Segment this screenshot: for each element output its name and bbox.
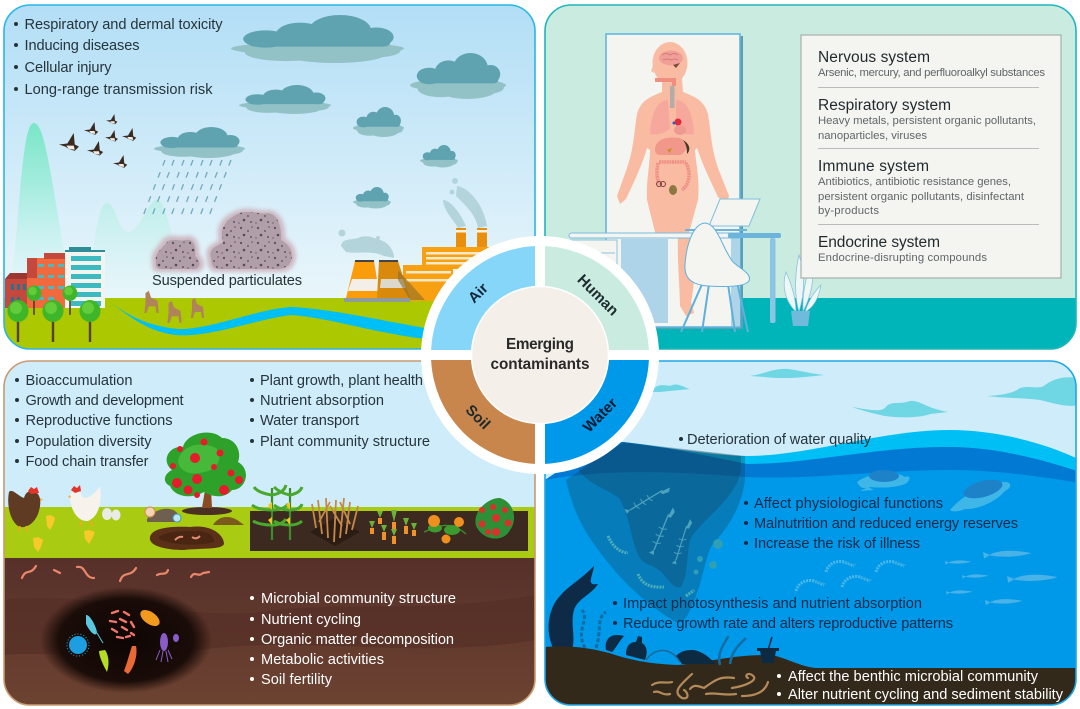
label: suspended particulates: Suspended particulates — [152, 273, 302, 289]
text: air effects: Long-range transmission risk — [24, 82, 213, 98]
ground — [4, 298, 434, 348]
text: soil effects: Organic matter decomposition — [261, 632, 454, 648]
respiratory system: nanoparticles, viruses — [818, 130, 927, 142]
ring label: water: Water — [580, 395, 621, 436]
icon: shrimps — [796, 561, 906, 591]
icon: corn — [252, 485, 302, 540]
ring label: human: Human — [574, 271, 622, 319]
icon: brain — [659, 50, 683, 68]
icon: trees — [8, 286, 100, 342]
text: soil effects: Soil fertility — [261, 672, 333, 688]
icon: brown hen — [8, 487, 43, 532]
icon: compost — [145, 507, 244, 525]
immune system: persistent organic pollutants, disinfectant — [818, 191, 1025, 203]
seabed — [545, 646, 1080, 709]
respiratory system: Heavy metals, persistent organic pollutants, — [818, 115, 1036, 127]
text: flora effects: Impact photosynthesis and nutrient absorption — [623, 596, 922, 612]
panel: soil — [4, 361, 535, 708]
center title: Emerging — [506, 336, 574, 353]
icon: suspended particulate clouds — [152, 209, 296, 272]
icon: chicks — [33, 515, 95, 552]
icon: kelp — [549, 566, 624, 652]
text: benthic effects: Affect the benthic microbial community — [788, 669, 1039, 685]
text: air effects — [14, 17, 223, 98]
text: air effects: Inducing diseases — [24, 38, 140, 54]
icon: smoke — [338, 178, 487, 258]
immune system: by-products — [818, 205, 879, 217]
icon: fish skeletons — [624, 488, 706, 566]
icon: plant — [784, 255, 821, 326]
icon: wheat — [310, 498, 360, 546]
icon: apple tree — [165, 433, 246, 515]
icon: microbes — [67, 607, 179, 674]
immune system — [818, 158, 1025, 217]
icon: fishes — [945, 551, 1058, 605]
icon: clouds — [231, 15, 506, 208]
icon: river — [105, 298, 425, 339]
text: animal effects: Food chain transfer — [26, 454, 149, 470]
text: animal effects: Bioaccumulation — [26, 373, 132, 389]
endocrine system — [818, 234, 987, 264]
text: air effects: Respiratory and dermal toxicity — [24, 17, 223, 33]
nervous system: Arsenic, mercury, and perfluoroalkyl substances — [818, 67, 1045, 79]
icon: crop field — [250, 485, 528, 551]
icon: carrots — [369, 510, 417, 544]
text: animal effects — [15, 373, 184, 470]
text: flora effects — [613, 596, 953, 632]
icon: heart — [672, 118, 686, 135]
panel: water — [545, 361, 1080, 709]
ring label: air: Air — [465, 280, 492, 307]
water surface wave — [545, 430, 1080, 709]
text box: body systems — [801, 35, 1061, 278]
icon: eggs — [102, 508, 120, 520]
icon: trachea — [655, 78, 676, 108]
text: soil effects: Microbial community structure — [261, 591, 456, 607]
text: plant effects: Plant growth, plant health — [260, 373, 423, 389]
icon: earthworms — [22, 566, 209, 581]
icon: dirt hole with worm — [150, 526, 224, 550]
text: soil effects: Nutrient cycling — [261, 612, 361, 628]
text: plant effects: Plant community structure — [260, 434, 430, 450]
icon: digestive organs — [655, 138, 689, 155]
ground — [4, 507, 535, 559]
text: fauna effects — [744, 496, 1018, 552]
text: soil effects — [250, 591, 456, 688]
icon: polluted shrimps — [608, 536, 694, 596]
darker wave band — [545, 442, 1080, 709]
text: benthic effects: Alter nutrient cycling and sediment stability — [788, 687, 1064, 703]
text: fauna effects: Affect physiological functions — [754, 496, 943, 512]
endocrine system: Endocrine-disrupting compounds — [818, 252, 987, 264]
icon: marine litter — [626, 636, 779, 665]
center title: contaminants — [490, 356, 590, 373]
icon: turtles — [857, 470, 1010, 511]
immune system: Antibiotics, antibiotic resistance genes, — [818, 176, 1011, 188]
respiratory system — [818, 97, 1036, 142]
text: animal effects: Reproductive functions — [26, 413, 172, 429]
icon: bubbles — [694, 539, 723, 574]
icon: tomatoes — [475, 498, 514, 539]
text: water quality: Deterioration of water quality — [687, 432, 872, 448]
icon: desk — [569, 233, 781, 326]
panel: human — [545, 5, 1076, 349]
text: soil effects: Metabolic activities — [261, 652, 384, 668]
text: plant effects: Nutrient absorption — [260, 393, 384, 409]
immune system: Immune system — [818, 158, 929, 175]
text: air effects: Cellular injury — [24, 60, 112, 76]
icon: benthic worms — [652, 674, 768, 698]
soil layer — [4, 558, 535, 708]
text: benthic effects — [777, 669, 1064, 703]
icon: laptop — [685, 199, 760, 231]
icon: pumpkins — [424, 515, 466, 544]
icon: rain cloud — [143, 127, 245, 216]
endocrine system: Endocrine system — [818, 234, 940, 251]
icon: mountains — [14, 123, 172, 266]
icon: lungs — [650, 100, 694, 135]
text: animal effects: Growth and development — [26, 393, 184, 409]
nervous system — [818, 49, 1045, 79]
respiratory system: Respiratory system — [818, 97, 951, 114]
text: plant effects: Water transport — [260, 413, 359, 429]
central ring diagram — [421, 236, 659, 474]
icon: human body — [617, 42, 729, 316]
text: flora effects: Reduce growth rate and alters reproductive patterns — [623, 616, 953, 632]
icon: birds — [59, 114, 136, 168]
pollution plume — [566, 442, 745, 622]
icon: factory — [344, 228, 489, 302]
ring label: soil: Soil — [462, 402, 493, 433]
icon: chair — [681, 223, 750, 332]
panel: air — [0, 5, 540, 353]
icon: intestines — [656, 162, 689, 195]
icon: apartment buildings — [5, 247, 105, 308]
poster — [606, 34, 743, 329]
icon: sky clouds — [650, 369, 1080, 417]
center title — [490, 336, 590, 373]
icon: white hen — [68, 485, 101, 527]
text: animal effects: Population diversity — [26, 434, 152, 450]
dark soil cavity — [40, 587, 212, 693]
text: plant effects — [250, 373, 430, 450]
main water — [545, 470, 1080, 709]
nervous system: Nervous system — [818, 49, 930, 66]
text: fauna effects: Malnutrition and reduced energy reserves — [754, 516, 1018, 532]
floor — [656, 298, 1076, 348]
icon: deer — [144, 291, 204, 323]
text: fauna effects: Increase the risk of illness — [754, 536, 920, 552]
